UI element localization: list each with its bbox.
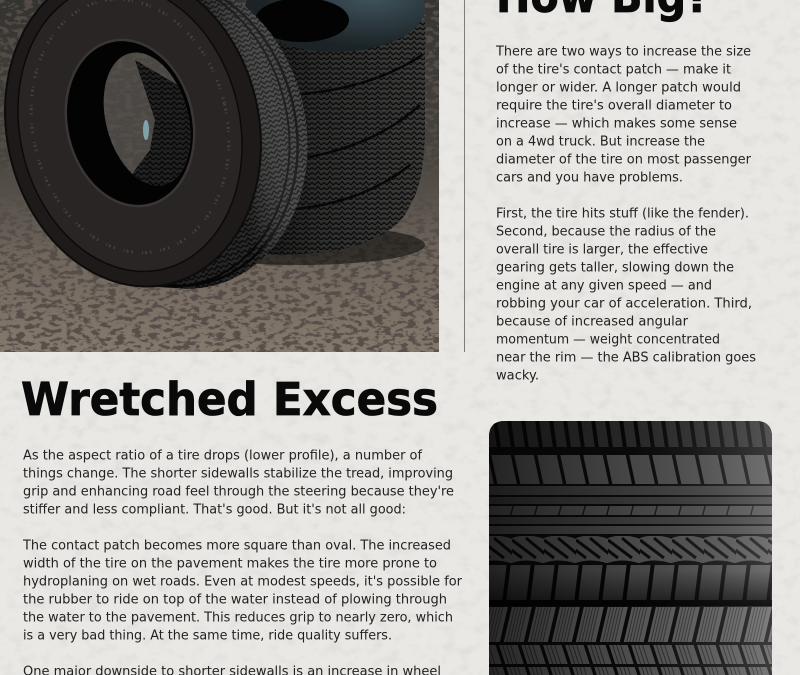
text block: contact patch: on a 4wd truck. But increase the bbox=[496, 133, 705, 149]
text block: problems with larger diameter: robbing your car of acceleration. Third, bbox=[496, 295, 752, 311]
text block: problems with larger diameter: momentum — weight concentrated bbox=[496, 331, 720, 347]
back tire stack bbox=[245, 0, 425, 255]
photo: tire tread close-up bbox=[489, 421, 772, 675]
text block: contact patch shape: hydroplaning on wet roads. Even at modest speeds, it's possible for bbox=[23, 573, 462, 589]
column divider line bbox=[464, 0, 465, 352]
text block: contact patch shape: is a very bad thing. At the same time, ride quality suffers. bbox=[23, 627, 392, 643]
text block: problems with larger diameter: gearing gets taller, slowing down the bbox=[496, 259, 734, 275]
text block: problems with larger diameter bbox=[496, 205, 756, 383]
heading: Wretched Excess: Wretched Excess bbox=[21, 373, 438, 426]
text block: problems with larger diameter: near the rim — the ABS calibration goes bbox=[496, 349, 756, 365]
text block: aspect ratio: As the aspect ratio of a tire drops (lower profile), a number of bbox=[23, 447, 423, 463]
sidewall bbox=[4, 0, 262, 288]
rim hole bbox=[64, 38, 196, 208]
text block: problems with larger diameter: wacky. bbox=[496, 367, 539, 383]
photo: stacked tires on gravel bbox=[0, 0, 439, 352]
text block: contact patch shape: the rubber to ride on top of the water instead of plowing through bbox=[23, 591, 447, 607]
text block: contact patch shape: width of the tire on the pavement makes the tire more prone to bbox=[23, 555, 437, 571]
text block: contact patch: diameter of the tire on most passenger bbox=[496, 151, 751, 167]
text block: problems with larger diameter: engine at any given speed — and bbox=[496, 277, 712, 293]
text block: problems with larger diameter: Second, because the radius of the bbox=[496, 223, 716, 239]
text block: problems with larger diameter: First, the tire hits stuff (like the fender). bbox=[496, 205, 749, 221]
text block: contact patch: require the tire's overall diameter to bbox=[496, 97, 732, 113]
text block: problems with larger diameter: overall tire is larger, the effective bbox=[496, 241, 708, 257]
text block: contact patch shape: the water to the pavement. This reduces grip to nearly zero, which bbox=[23, 609, 453, 625]
text block: contact patch: cars and you have problems. bbox=[496, 169, 683, 185]
text block: contact patch bbox=[495, 43, 751, 185]
text block: contact patch: longer or wider. A longer patch would bbox=[496, 79, 741, 95]
sidewall lettering bbox=[30, 0, 230, 254]
text block: aspect ratio: stiffer and less compliant. That's good. But it's not all good: bbox=[23, 501, 406, 517]
text block: aspect ratio: grip and enhancing road feel through the steering because they're bbox=[23, 483, 454, 499]
text block: aspect ratio: things change. The shorter sidewalls stabilize the tread, improving bbox=[23, 465, 453, 481]
text block: contact patch: There are two ways to increase the size bbox=[495, 43, 751, 59]
text block: aspect ratio bbox=[23, 447, 454, 517]
text block: problems with larger diameter: because of increased angular bbox=[496, 313, 688, 329]
text block: contact patch: of the tire's contact patch — make it bbox=[496, 61, 732, 77]
text block: contact patch shape bbox=[22, 537, 462, 643]
text block: contact patch shape: The contact patch becomes more square than oval. The increased bbox=[22, 537, 451, 553]
front leaning tire bbox=[4, 0, 308, 289]
text block: contact patch: increase — which makes some sense bbox=[496, 115, 737, 131]
